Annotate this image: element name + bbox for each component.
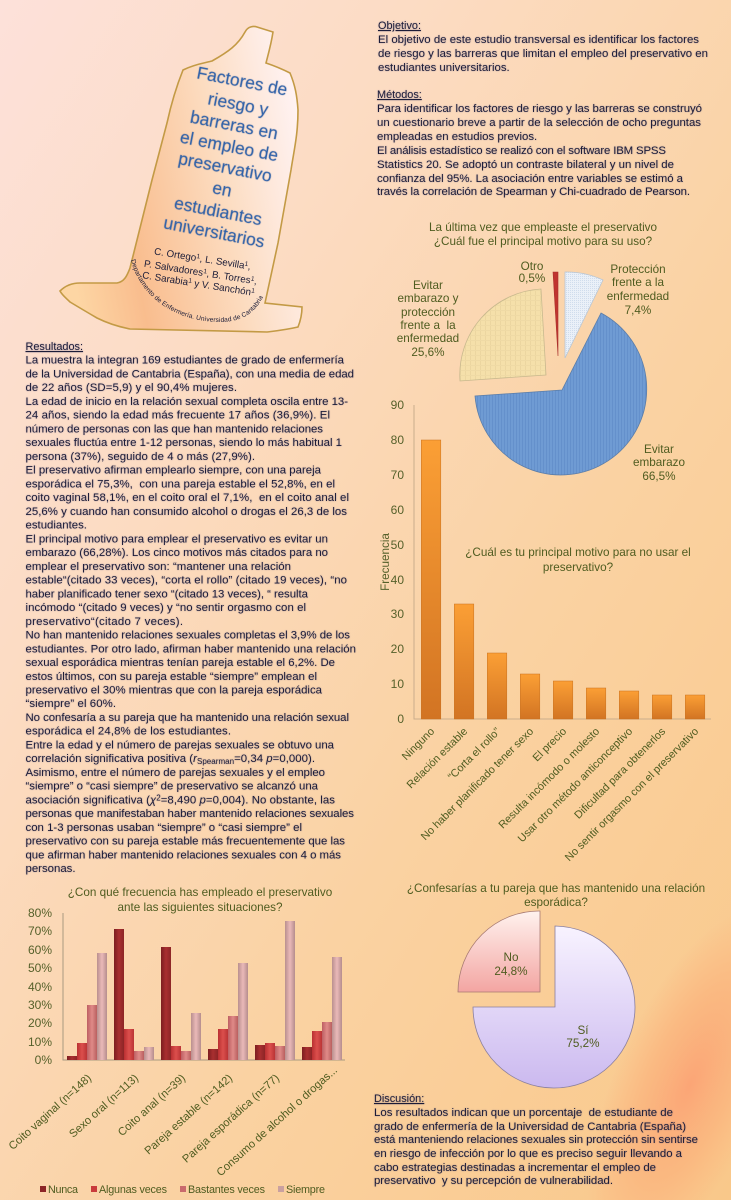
authors: P. Salvadores (143, 259, 204, 279)
grouped chart category labels: Coito vaginal (n=148) (7, 1072, 94, 1153)
results text block: Resultados: (26, 341, 83, 353)
label: evitar embarazo y proteccion: embarazo y (397, 292, 459, 305)
discussion text block (374, 1093, 698, 1187)
series: algunas veces (77, 1029, 322, 1060)
results text block: personas. (26, 863, 76, 875)
label: si: Sí (577, 1024, 589, 1037)
label: evitar embarazo y proteccion: enfermedad (397, 332, 459, 345)
authors: , B. Torres (206, 269, 251, 286)
discussion text block: preservativo y su percepción de vulnerabilidad. (374, 1175, 613, 1187)
results text block: sexuales fluctúa entre 1-12 personas, siendo lo más habitual 1 (26, 437, 342, 449)
methods text block: empleadas en estudios previos. (377, 131, 537, 143)
title: riesgo y (206, 88, 270, 120)
pie chart title: ¿Cuál fue el principal motivo para su uso? (434, 235, 653, 248)
slice: evitar embarazo (475, 313, 647, 475)
results text block: preservativo“(citado 7 veces). (26, 616, 183, 628)
results text block: estudiantes. (26, 520, 87, 532)
results text block: esporádica el 24,8% de los estudiantes. (26, 726, 231, 738)
results text block: preservativo el 30% mientras que con la pareja esporádica (26, 684, 323, 696)
results text block: Asimismo, entre el número de parejas sexuales y el empleo (26, 767, 325, 779)
grouped chart y axis: 0% (35, 1053, 52, 1067)
bar chart title: preservativo? (543, 561, 614, 574)
bar category labels: Relación estable (405, 726, 470, 791)
bar chart y axis: 0 (397, 712, 404, 726)
label: proteccion: 7,4% (625, 304, 651, 317)
bar category labels: Ninguno (400, 726, 437, 763)
objective text block: El objetivo de este estudio transversal es identificar los factores (378, 34, 699, 46)
title: en (211, 177, 234, 201)
authors: C. Ortego (153, 246, 197, 264)
pie chart title: La última vez que empleaste el preservativo (429, 221, 658, 234)
affiliation on curve: Departamento de Enfermería. Universidad de Cantabria (131, 259, 264, 322)
bar chart y axis: 90 (391, 398, 404, 412)
discussion text block: grado de enfermería de la Universidad de Cantabria (España) (374, 1121, 686, 1133)
legend: Nunca (48, 1184, 78, 1196)
methods text block: Para identificar los factores de riesgo y las barreras se construyó (377, 103, 702, 115)
methods text block: un cuestionario breve a partir de la selección de ocho preguntas (377, 117, 701, 129)
methods text block: El análisis estadístico se realizó con el software IBM SPSS (377, 145, 666, 157)
results text block: correlación significativa positiva (r (26, 753, 197, 765)
label: evitar embarazo y proteccion: protección (401, 306, 455, 319)
objective text block: Objetivo: (378, 20, 421, 32)
bar category labels: Resulta incómodo o molesto (496, 726, 602, 831)
results text block: con 1-3 personas usaban “siempre” o “casi siempre” el (26, 822, 302, 834)
results text block: “siempre” el 60%. (26, 698, 116, 710)
bar chart y axis (379, 398, 711, 726)
discussion text block: cabo estrategias destinadas a incrementar el empleo de (374, 1162, 656, 1174)
methods text block: confianza del 95%. La asociación entre variables se estimó a (377, 173, 684, 185)
discussion text block: Los resultados indican que un porcentaje de estudiante de (374, 1107, 673, 1119)
results text block: Entre la edad y el número de parejas sexuales se obtuvo una (26, 740, 335, 752)
bars (421, 440, 705, 719)
results text block: estudiantes. Por otro lado, afirman haber mantenido una relación (26, 643, 356, 655)
results text block: de 22 años (SD=5,9) y el 90,4% mujeres. (26, 382, 237, 394)
label: evitar embarazo y proteccion: Evitar (413, 279, 443, 292)
label: proteccion: Protección (610, 263, 666, 276)
grouped chart y axis: 30% (28, 998, 52, 1012)
results text block: haber planificado tener sexo “(citado 13 veces), “ resulta (26, 588, 309, 600)
series: nunca (67, 929, 312, 1060)
methods text block: Statistics 20. Se adoptó un contraste bilateral y un nivel de (377, 159, 674, 171)
label: no: 24,8% (494, 965, 528, 978)
title: barreras en (189, 107, 280, 143)
bar chart y axis: 60 (391, 503, 404, 517)
results text block: 2 (156, 793, 161, 802)
bar chart y axis: 40 (391, 573, 404, 587)
bar chart y axis: 80 (391, 433, 404, 447)
grouped chart title: ¿Con qué frecuencia has empleado el preservativo (68, 886, 333, 899)
grouped chart category labels: Pareja estable (n=142) (143, 1072, 235, 1157)
results text block: esporádica el 75,3%, con una pareja estable el 52,8%, en el (26, 478, 335, 490)
results text block: No han mantenido relaciones sexuales completas el 3,9% de los (26, 630, 350, 642)
grouped chart category labels: Sexo oral (n=113) (67, 1072, 141, 1140)
results text block: =0,34 (234, 753, 266, 765)
grouped chart y axis: 10% (28, 1035, 52, 1049)
results text block: persona (37%), seguido de 4 o más (27,9%). (26, 451, 255, 463)
legend: Siempre (286, 1184, 325, 1196)
authors: 1 (250, 276, 255, 283)
results text block: emplear el preservativo son: “mantener una relación (26, 561, 291, 573)
results text block: =8,490 (161, 794, 199, 806)
label: evitar embarazo: embarazo (633, 456, 685, 469)
title: Factores de (195, 63, 289, 100)
grouped chart y axis: 60% (28, 943, 52, 957)
title: preservativo (177, 148, 274, 186)
authors: y V. Sanchón (191, 278, 252, 298)
results text block (26, 341, 356, 875)
bar category labels: No sentir orgasmo con el preservativo (563, 726, 701, 864)
label: evitar embarazo y proteccion: 25,6% (411, 346, 445, 359)
results text block: estos últimos, con su pareja estable “siempre” emplean el (26, 671, 317, 683)
bar chart y axis: 20 (391, 642, 404, 656)
bar category labels (400, 725, 701, 864)
objective text block: de riesgo y las barreras que limitan el empleo del preservativo en (378, 48, 708, 60)
slice: otro (553, 272, 558, 356)
grouped chart category labels: Pareja esporádica (n=77) (180, 1072, 282, 1165)
label: proteccion: frente a la (612, 276, 664, 289)
authors: , (253, 276, 258, 287)
methods text block: través la correlación de Spearman y Chi-cuadrado de Pearson. (377, 186, 690, 198)
slice: proteccion (565, 272, 603, 358)
title condom shape (59, 26, 303, 333)
label: proteccion: enfermedad (607, 290, 669, 303)
pie chart: confesar (407, 882, 705, 1088)
results text block: asociación significativa (χ (26, 794, 156, 806)
series: bastantes veces (87, 1005, 332, 1060)
grouped chart y axis: 50% (28, 961, 52, 975)
methods text block (377, 89, 702, 198)
results text block: sexual esporádica mientras tenían pareja estable el 6,2%. De (26, 657, 335, 669)
bar chart y axis: 10 (391, 677, 404, 691)
label: otro: Otro (521, 260, 544, 273)
label: otro: 0,5% (519, 272, 545, 285)
title: universitarios (162, 213, 267, 252)
authors: C. Sarabia (141, 270, 189, 288)
bar category labels: Dificultad para obtenerlos (572, 725, 669, 821)
authors: 1 (203, 268, 208, 276)
grouped chart y axis: 70% (28, 924, 52, 938)
slice: si (473, 926, 635, 1088)
bar category labels: El precio (531, 726, 569, 764)
bar chart y axis: 50 (391, 538, 404, 552)
authors (141, 246, 258, 299)
bar category labels: No haber planificado tener sexo (419, 726, 536, 843)
results text block: La edad de inicio en la relación sexual completa oscila entre 13- (26, 396, 348, 408)
bar category labels: “Corta el rollo” (446, 725, 503, 783)
grouped bar chart: frecuencia de empleo (7, 886, 345, 1196)
label: evitar embarazo: Evitar (644, 443, 674, 456)
label: no: No (504, 951, 519, 964)
results text block: p=0,000). (266, 753, 315, 765)
grouped chart category labels: Consumo de alcohol o drogas... (215, 1064, 340, 1179)
results text block: p=0,004). No obstante, las (199, 794, 335, 806)
results text block: “siempre” o “casi siempre” de preservativo se alcanzó una (26, 781, 319, 793)
bar category labels: Usar otro método anticonceptivo (516, 726, 635, 845)
results text block: que afirman haber mantenido relaciones sexuales con 4 o más (26, 849, 341, 861)
discussion text block: está manteniendo relaciones sexuales sin protección sin sentirse (374, 1134, 698, 1146)
series: siempre (97, 921, 342, 1060)
authors: 1 (251, 287, 256, 295)
objective text block (378, 20, 708, 74)
methods text block: Métodos: (377, 89, 422, 101)
grouped chart y axis: 40% (28, 980, 52, 994)
results text block: coito vaginal 58,1%, en el coito oral el 7,1%, en el coito anal el (26, 492, 349, 504)
results text block: El principal motivo para emplear el preservativo es evitar un (26, 533, 328, 545)
discussion text block: Discusión: (374, 1093, 424, 1105)
pie chart: motivo de uso (397, 221, 685, 483)
results text block: preservativo con su pareja estable más frecuentemente que las (26, 836, 345, 848)
label: si: 75,2% (566, 1037, 600, 1050)
bar chart y axis: 30 (391, 607, 404, 621)
results text block: embarazo (66,28%). Los cinco motivos más citados para no (26, 547, 328, 559)
legend: Algunas veces (99, 1184, 168, 1196)
bar chart y axis: Frecuencia (379, 533, 392, 591)
results text block: Spearman (197, 757, 234, 766)
title: estudiantes (173, 193, 264, 229)
title: el empleo de (178, 127, 280, 165)
grouped chart category labels (7, 1064, 340, 1179)
label: evitar embarazo: 66,5% (642, 470, 676, 483)
grouped chart title: ante las siguientes situaciones? (117, 901, 283, 914)
results text block: personas que manifestaban haber mantenido relaciones sexuales (26, 808, 354, 820)
authors: 1 (244, 261, 249, 268)
results text block: 24 años, siendo la edad más frecuente 17 años (36,9%). El (26, 410, 330, 422)
authors: 1 (196, 253, 201, 261)
grouped chart category labels: Coito anal (n=39) (116, 1072, 188, 1139)
bar chart: motivos para no usar (379, 398, 711, 864)
discussion text block: en riesgo de infección por lo que es preciso seguir llevando a (374, 1148, 683, 1160)
legend: Bastantes veces (188, 1184, 266, 1196)
results text block: estable“(citado 33 veces), “corta el rollo” (citado 19 veces), “no (26, 575, 347, 587)
confess pie title: ¿Confesarías a tu pareja que has mantenido una relación (407, 882, 705, 895)
bar chart y axis: 70 (391, 468, 404, 482)
grouped chart y axis (28, 906, 345, 1067)
confess pie title: esporádica? (524, 896, 588, 909)
slice: evitar embarazo y proteccion (460, 289, 546, 381)
results text block: 25,6% y cuando han consumido alcohol o drogas el 26,3 de los (26, 506, 347, 518)
title (162, 63, 289, 252)
grouped chart y axis: 20% (28, 1016, 52, 1030)
bar chart title: ¿Cuál es tu principal motivo para no usar el (465, 546, 691, 559)
results text block: número de personas con las que han mantenido relaciones (26, 423, 323, 435)
slice: no (458, 911, 540, 992)
legend (40, 1184, 325, 1196)
results text block: de la Universidad de Cantabria (España), con una media de edad (26, 368, 354, 380)
authors: , (247, 261, 251, 273)
results text block: El preservativo afirman emplearlo siempre, con una pareja (26, 465, 322, 477)
grouped chart y axis: 80% (28, 906, 52, 920)
results text block: incómodo “(citado 9 veces) y “no sentir orgasmo con el (26, 602, 306, 614)
authors: 1 (188, 277, 193, 285)
authors: , L. Sevilla (199, 254, 246, 272)
results text block: No confesaría a su pareja que ha mantenido una relación sexual (26, 712, 349, 724)
objective text block: estudiantes universitarios. (378, 62, 510, 74)
label: evitar embarazo y proteccion: frente a la (400, 319, 456, 332)
results text block: La muestra la integran 169 estudiantes de grado de enfermería (26, 355, 345, 367)
